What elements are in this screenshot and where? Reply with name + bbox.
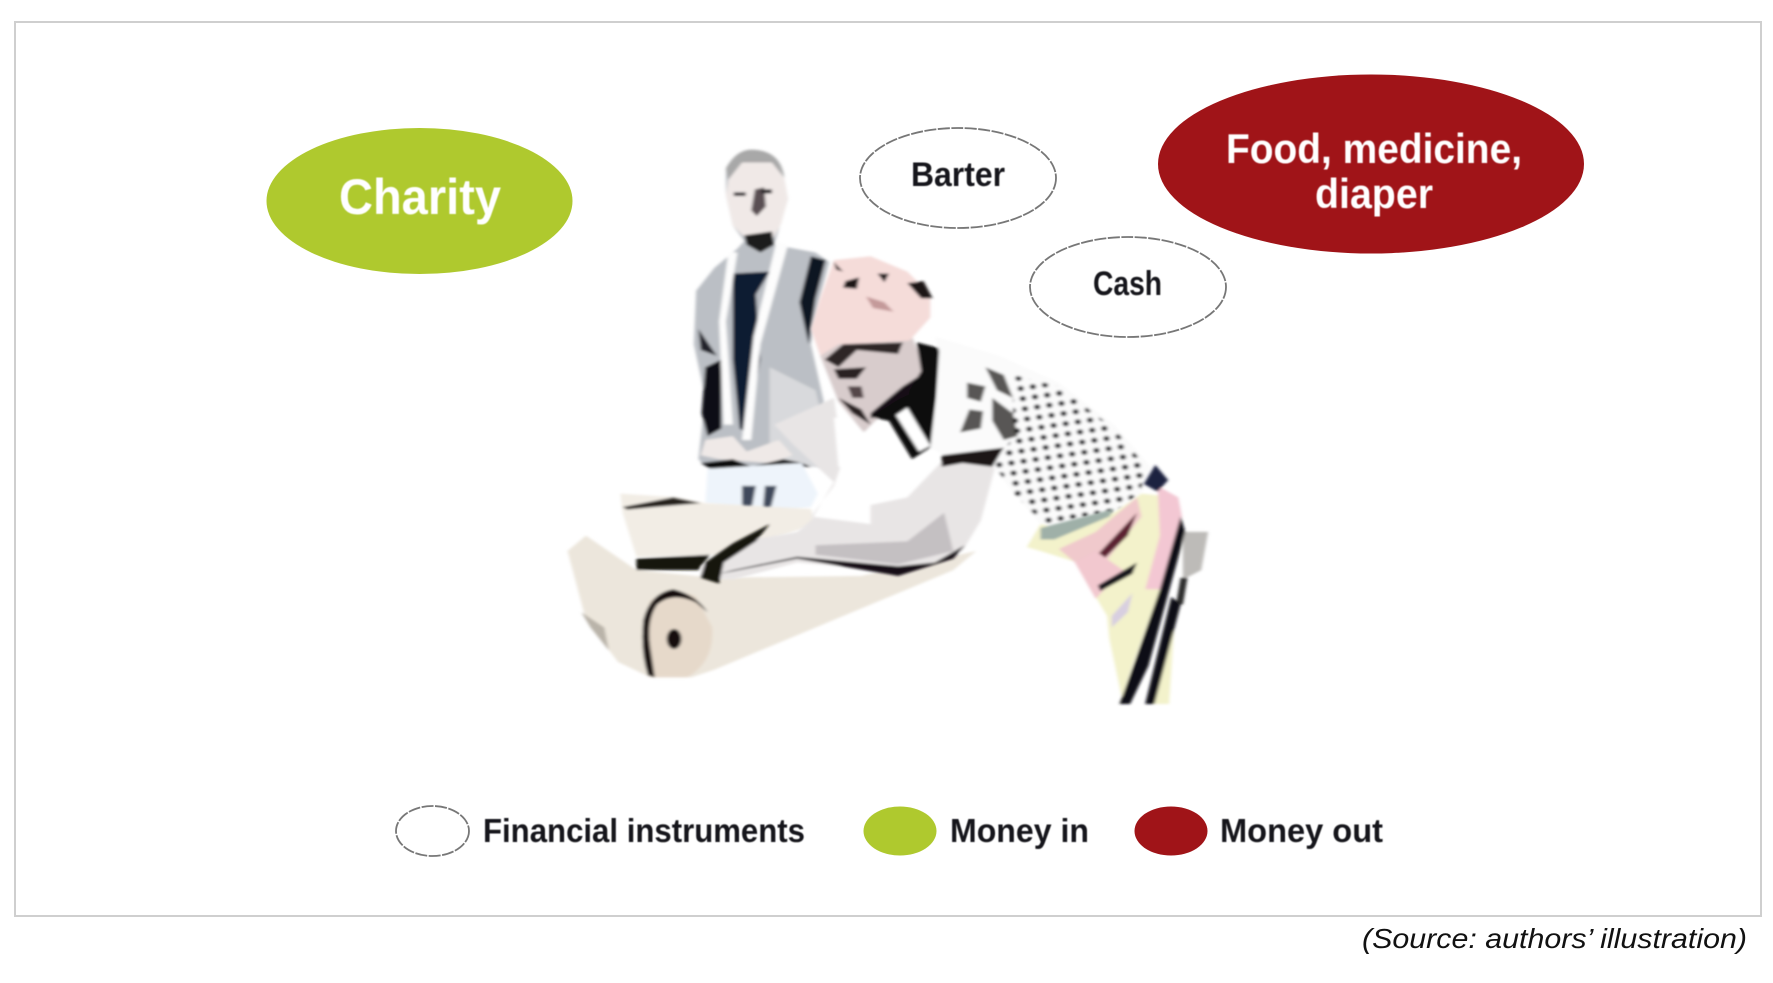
illustration: tailors working with a paper roll: [568, 150, 1208, 704]
bubble: Food, medicine, diaper (money out): diaper: [1315, 170, 1433, 217]
bubble: Cash (financial instrument): [1030, 237, 1226, 337]
legend item: Financial instruments: Financial instruments: [483, 812, 805, 849]
skirt stripes: [1027, 465, 1208, 704]
bubble: Charity (money in): [266, 128, 572, 274]
legend item: Money out: Money out: [1220, 812, 1383, 849]
legend item: Financial instruments: [396, 806, 805, 856]
bubble: Cash (financial instrument): Cash: [1093, 265, 1162, 303]
bubble: Barter (financial instrument): Barter: [911, 156, 1005, 194]
work table and paper roll: [568, 494, 976, 677]
woman bending over the table: [701, 256, 1155, 583]
legend item: Money in: [864, 806, 1089, 856]
legend item: Money out: [1134, 806, 1383, 856]
legend: [396, 806, 1383, 856]
bubble: Charity (money in): Charity: [339, 169, 501, 225]
legend item: Money in: Money in: [950, 812, 1089, 849]
man standing: [694, 150, 838, 513]
bubble: Food, medicine, diaper (money out): [1158, 74, 1584, 254]
bubble: Food, medicine, diaper (money out): Food, medicine,: [1226, 125, 1522, 172]
source caption: (Source: authors’ illustration): [1362, 923, 1747, 954]
bubble: Barter (financial instrument): [860, 128, 1056, 228]
